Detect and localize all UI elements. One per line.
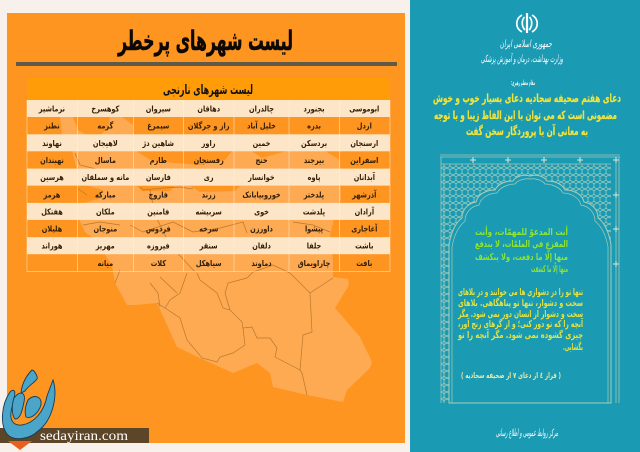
row 6: هرمز	[43, 190, 60, 200]
row 6: زرند	[202, 190, 216, 200]
row 6: آذرشهر	[351, 188, 377, 200]
icon: emblem of Iran	[517, 13, 537, 33]
row 3: راور	[201, 138, 216, 148]
row 7	[41, 206, 374, 217]
Persian translation	[457, 287, 583, 353]
row 8: سرخه	[199, 224, 218, 234]
row 4: رفسنجان	[194, 155, 224, 165]
row 5: خوانسار	[247, 172, 275, 182]
table: orange cities	[27, 78, 390, 272]
row 2: نطنز	[43, 121, 60, 131]
row 1	[38, 104, 379, 114]
row 5: فارسان	[146, 172, 171, 182]
row 1: بجنورد	[303, 104, 325, 114]
green Arabic supplication: المفزع في الملمّات، لا يندفع	[475, 239, 568, 250]
row 5: ری	[204, 172, 214, 182]
row 10: بافت	[356, 258, 373, 268]
table title: لیست شهرهای نارنجی	[163, 83, 253, 98]
row 8: آغاجاری	[351, 223, 378, 234]
row 3: نهاوند	[42, 138, 62, 148]
row 1: چالدران	[249, 104, 274, 114]
row 8: فردوس	[146, 224, 171, 234]
watermark: sedayiran	[0, 370, 149, 450]
row 7: ملکان	[96, 207, 115, 217]
row 2: گرمه	[97, 121, 114, 131]
panel: teal prayer poster: منها إلّا ما كشفت	[531, 261, 568, 275]
panel: teal prayer poster: مقام معظم رهبری:	[511, 79, 535, 87]
row 7: فامنین	[147, 207, 169, 217]
map of Iran	[60, 117, 372, 402]
green Arabic supplication: أنت المدعوّ للمهمّات، وأنت	[475, 225, 568, 238]
row 8	[42, 223, 378, 234]
row 1: ابوموسی	[349, 104, 379, 114]
row 7: هفتکل	[41, 207, 63, 217]
icon: blue calligraphic logo	[2, 370, 55, 439]
citation: ( فراز ٤ از دعای ٧ از صحیفه سجادیه )	[461, 371, 561, 380]
panel: high-risk cities	[7, 13, 405, 443]
row 8: هلیلان	[42, 224, 62, 234]
row 9: فیروزه	[147, 241, 170, 251]
divider	[16, 62, 397, 66]
row 9: جلفا	[307, 241, 321, 251]
row 10: چاراویماق	[298, 258, 330, 268]
green Arabic supplication: منها إلّا ما دفعت، ولا ينكشف	[475, 249, 568, 263]
ministry name: جمهوری اسلامی ایران	[500, 39, 552, 50]
green Arabic supplication	[475, 225, 568, 275]
row 2: اردل	[357, 121, 372, 131]
row 8: داورزن	[250, 224, 273, 234]
row 8: پیشوا	[305, 224, 323, 234]
row 8: منوجان	[94, 224, 117, 234]
row 4: طارم	[150, 155, 167, 165]
row 9	[42, 241, 374, 251]
watermark bar	[0, 428, 149, 443]
row 3: بردسکن	[301, 138, 327, 148]
row 10: میانه	[98, 258, 114, 268]
row 7: آرادان	[355, 206, 374, 217]
yellow quote	[433, 91, 621, 139]
row 1: کوهسرخ	[91, 104, 120, 114]
row 2: خلیل آباد	[247, 120, 276, 131]
ornamental arch frame	[440, 155, 620, 403]
row 2: راز و جرگلان	[188, 121, 229, 131]
row 6: پلدختر	[303, 190, 324, 200]
row 2: بدره	[307, 121, 321, 131]
row 4: اسفراین	[350, 155, 378, 165]
row 9: مهریز	[95, 241, 115, 251]
row 1: دهاقان	[197, 104, 220, 114]
row 4: بیرجند	[304, 155, 324, 165]
row 1: نرماشیر	[38, 104, 65, 114]
row 5: آبدانان	[354, 171, 375, 182]
row 2	[43, 120, 372, 131]
row 4: نهبندان	[40, 155, 64, 165]
watermark text: sedayiran.com	[40, 428, 129, 443]
row 6: خوروبیابانک	[242, 190, 281, 200]
row 4: ماسال	[95, 155, 116, 165]
row 9: دلفان	[252, 241, 271, 251]
panel: teal prayer poster	[410, 0, 640, 452]
row 3: لاهیجان	[93, 138, 118, 148]
Persian translation: بگشایی.	[563, 341, 583, 353]
row 2: سیمرغ	[147, 121, 169, 131]
row 6: فاروج	[149, 190, 168, 200]
row 3: شاهین دژ	[142, 138, 174, 148]
row 9: باشت	[355, 241, 374, 251]
row 10: دماوند	[251, 258, 272, 268]
row 4: خنج	[255, 155, 268, 165]
row 5: پاوه	[308, 172, 321, 182]
heading: لیست شهرهای پرخطر	[117, 26, 293, 57]
row 3: ارسنجان	[350, 138, 378, 148]
row 10: سیاهکل	[196, 258, 222, 268]
row 5	[40, 171, 375, 182]
row 5: مانه و سملقان	[81, 172, 130, 182]
row 3	[42, 138, 378, 148]
row 10	[98, 258, 373, 268]
row 4	[40, 155, 378, 165]
row 7: خوی	[254, 207, 269, 217]
row 6: مبارکه	[95, 190, 116, 200]
Persian translation: چیزی گشوده نمی شود. مگر آنچه را تو	[457, 328, 583, 341]
cream row bands	[27, 100, 390, 254]
Persian translation: سخت و دشوار، تنها تو پناهگاهی. بلاهای	[458, 297, 583, 309]
row 6	[43, 188, 377, 200]
icon: down triangle	[8, 441, 32, 450]
row 3: خمین	[253, 138, 270, 148]
row 9: هوراند	[42, 241, 62, 251]
panel: teal prayer poster: مرکز روابط عمومی و اطلاع رسانی	[496, 428, 558, 439]
row 1: سیروان	[146, 104, 171, 114]
row 7: پلدشت	[303, 207, 325, 217]
row 7: سربیشه	[196, 207, 222, 217]
row 10: کلات	[151, 258, 167, 268]
row 9: سنقر	[199, 241, 218, 251]
row 5: هرسین	[40, 172, 64, 182]
ministry name	[481, 39, 563, 65]
